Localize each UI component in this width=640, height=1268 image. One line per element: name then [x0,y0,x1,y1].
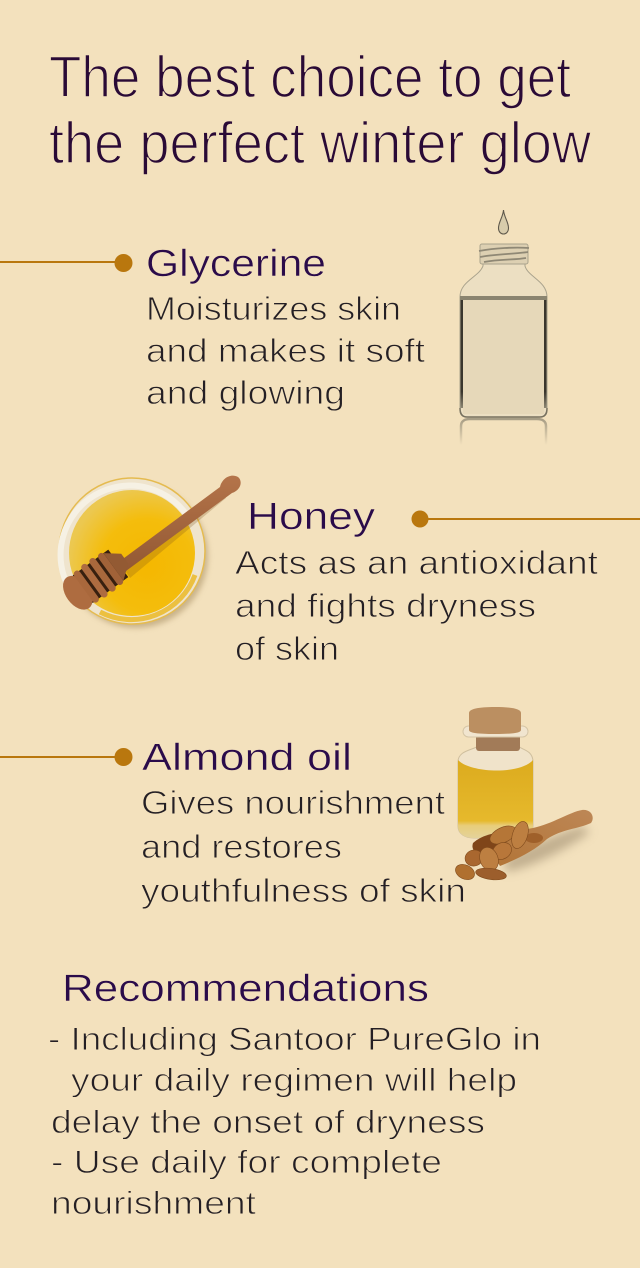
panel: honey [56,476,640,667]
title [49,45,592,176]
text: almond oil description: Gives nourishment [141,784,445,821]
panel: almond oil [0,707,593,909]
title: The best choice to get [49,45,571,110]
text: almond oil description [141,784,466,909]
text: glycerine description [146,290,425,411]
text: recommendations list: - Use daily for complete [51,1144,442,1180]
text: honey description [235,544,598,667]
text: recommendations list [48,1021,541,1221]
connector: almond oil [0,748,132,766]
text: recommendations list: nourishment [51,1185,256,1221]
heading: glycerine: Glycerine [146,243,326,285]
heading: recommendations: Recommendations [62,968,429,1010]
icon: almond oil jar with almonds [453,707,593,883]
text: glycerine description: and makes it soft [146,332,425,369]
text: recommendations list: your daily regimen will help [71,1062,517,1098]
text: recommendations list: - Including Santoor PureGlo in [48,1021,541,1057]
text: recommendations list: delay the onset of dryness [51,1104,485,1140]
text: honey description: and fights dryness [235,587,536,624]
panel: recommendations [48,968,541,1221]
heading: honey: Honey [247,496,375,538]
panel: glycerine [0,210,547,445]
icon: glycerine bottle [460,210,547,445]
text: glycerine description: Moisturizes skin [146,290,401,327]
heading: almond oil: Almond oil [142,737,352,779]
text: glycerine description: and glowing [146,374,345,411]
icon: honey bowl with dipper [56,476,241,628]
text: honey description: of skin [235,630,339,667]
text: honey description: Acts as an antioxidant [235,544,598,581]
text: almond oil description: and restores [141,828,342,865]
connector: honey [412,510,640,528]
connector: glycerine [0,254,132,272]
text: almond oil description: youthfulness of skin [141,872,466,909]
title: the perfect winter glow [49,111,592,176]
